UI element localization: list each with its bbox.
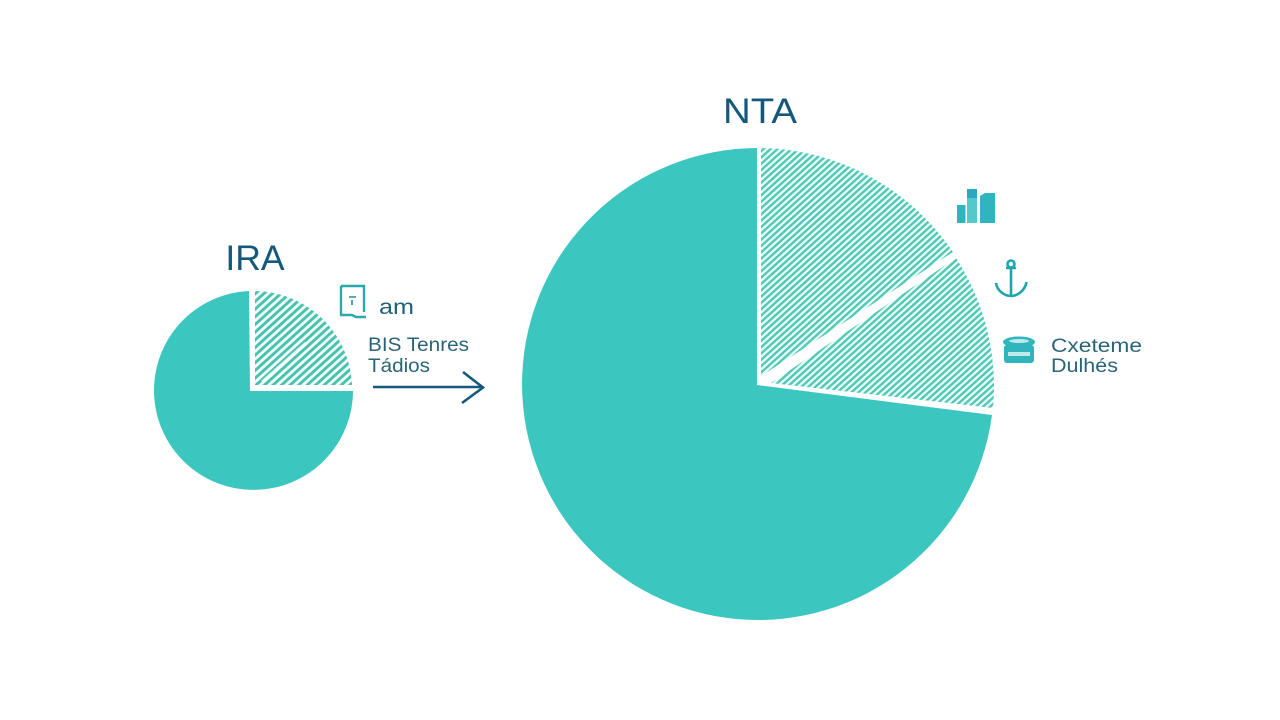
icon: cylinder xyxy=(1003,336,1035,363)
arrow: IRA to NTA xyxy=(373,372,483,403)
text block: NTA description: Dulhés xyxy=(1051,355,1118,377)
label: am: am xyxy=(379,296,414,319)
text block: IRA description: BIS Tenres xyxy=(368,334,469,356)
divider: IRA hatched slices xyxy=(262,343,306,382)
text block: IRA description: Tádios xyxy=(368,355,430,377)
pie slice: IRA hatched upper xyxy=(255,291,352,385)
panel: NTA pie group xyxy=(522,92,994,620)
pie slice: NTA hatched upper xyxy=(761,148,953,376)
icon: anchor xyxy=(996,260,1026,296)
title: NTA: NTA xyxy=(723,92,798,131)
title: IRA: IRA xyxy=(225,238,285,278)
pie slice: IRA solid xyxy=(154,291,353,490)
text block: NTA description: Cxeteme xyxy=(1051,335,1142,357)
icon: buildings xyxy=(957,189,995,223)
pie slice: NTA hatched lower xyxy=(771,258,994,408)
pie slice: NTA solid xyxy=(522,148,992,620)
panel: IRA pie group xyxy=(154,238,353,490)
text block: IRA description xyxy=(368,334,469,377)
icon: document xyxy=(341,286,366,317)
text block: NTA description xyxy=(1051,335,1142,377)
